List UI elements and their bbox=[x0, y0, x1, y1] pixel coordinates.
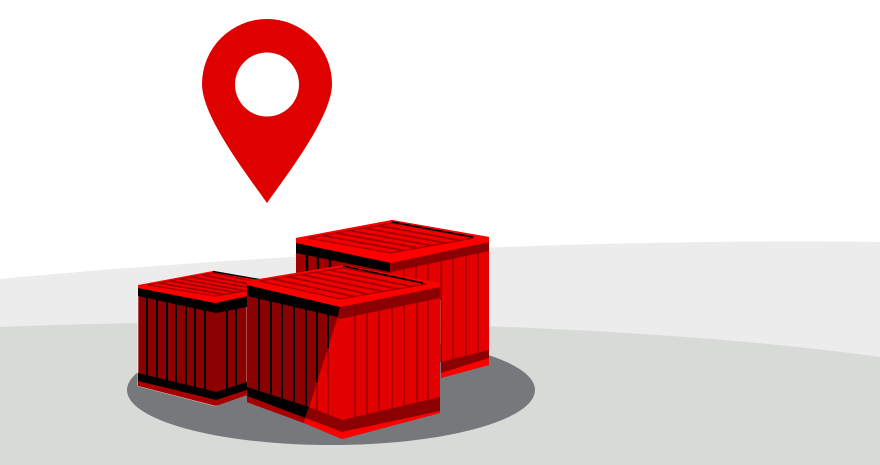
shaded side of front crate bbox=[247, 285, 341, 423]
crate shadow bbox=[127, 335, 535, 445]
crate slats bbox=[259, 290, 328, 406]
back crate bbox=[296, 220, 489, 378]
location pin icon bbox=[202, 19, 332, 203]
crate bands bbox=[337, 287, 440, 319]
crate top bbox=[247, 265, 440, 307]
front crate bbox=[247, 265, 440, 439]
background hill bbox=[0, 241, 880, 465]
ground bbox=[0, 322, 880, 465]
left crate bbox=[138, 271, 290, 406]
